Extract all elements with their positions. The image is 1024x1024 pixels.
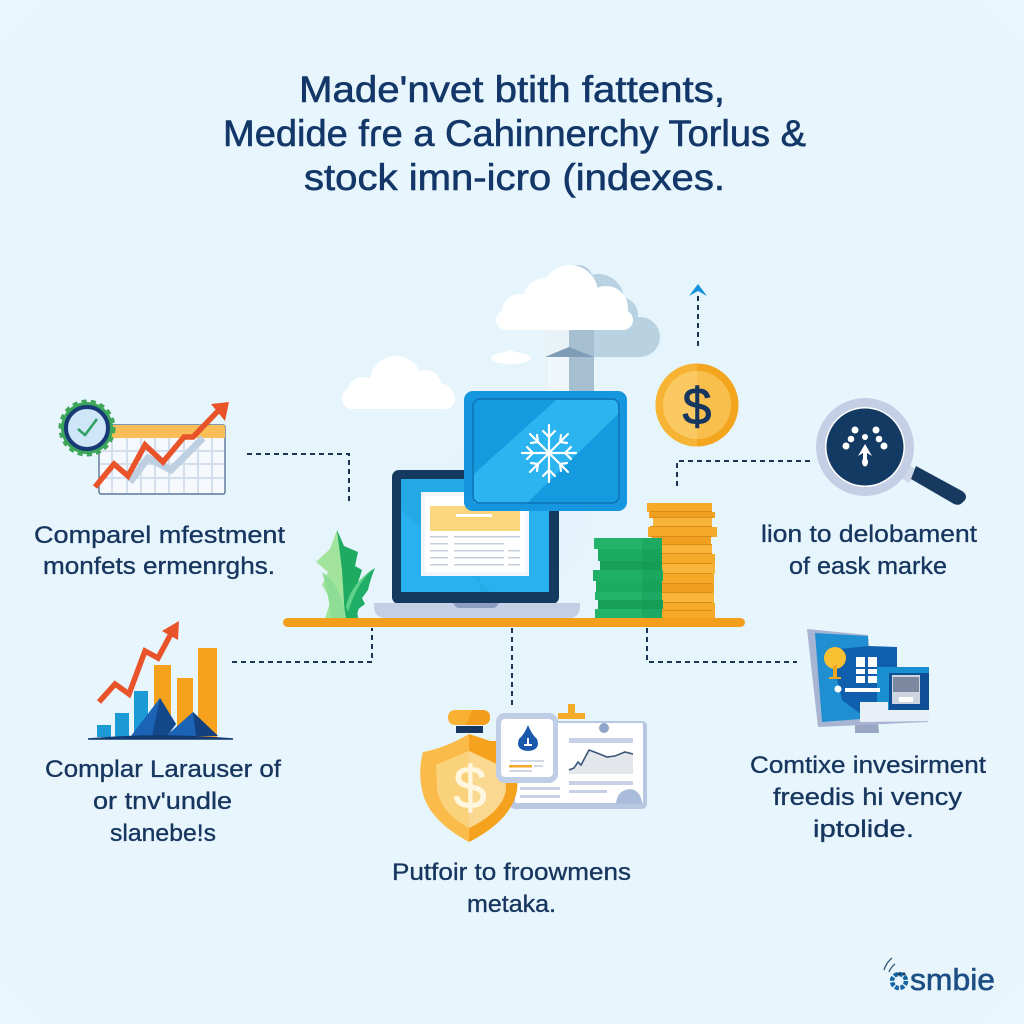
- text: bottom centre: metaka.: [467, 891, 556, 918]
- icon: bar chart with mountains: [88, 621, 233, 739]
- icon: gold coin stack: [647, 503, 717, 618]
- text: bottom right: Comtixe invesirment: [750, 752, 986, 779]
- text: compare investment: [34, 522, 285, 580]
- dashed connectors: [232, 454, 810, 706]
- icon: dollar coin: [655, 364, 738, 446]
- text: top right: [761, 521, 977, 580]
- icon: calendar chart with gear: [61, 402, 229, 494]
- icon: dollar coin: $: [683, 378, 712, 436]
- logo: [884, 958, 995, 997]
- title: [223, 69, 806, 198]
- text: bottom right: freedis hi vency: [773, 784, 963, 811]
- icon: green cash stack: [593, 538, 663, 618]
- text: top right: of eask marke: [789, 553, 947, 580]
- title: stock imn-icro (indexes.: [304, 157, 725, 198]
- icon: report document: [510, 704, 647, 809]
- icon: main cloud: [496, 265, 633, 330]
- title: Medide fɾe a Cahinnerchy Torlus &: [223, 113, 806, 154]
- title: Made'nvet btith fattents,: [299, 69, 725, 110]
- text: complex language: [45, 756, 281, 847]
- logo: smbie: [910, 962, 995, 997]
- icon: small cloud: [491, 350, 531, 364]
- shelf: [283, 618, 745, 627]
- icon: shield money bag: [420, 710, 517, 842]
- text: bottom centre: [392, 859, 631, 918]
- text: compare investment: monfets ermenrghs.: [43, 553, 275, 580]
- icon: left cloud: [342, 356, 455, 409]
- icon: laptop: [374, 470, 580, 618]
- text: complex language: slanebe!s: [110, 820, 216, 847]
- icon: back cloud: [560, 265, 660, 357]
- icon: monitor dashboard: [807, 629, 929, 733]
- text: bottom right: [750, 752, 986, 843]
- text: compare investment: Comparel mfestment: [34, 522, 285, 549]
- icon: snowflake tablet: [464, 391, 627, 511]
- icon: shield money bag: $: [453, 754, 487, 821]
- text: complex language: or tnv'undle: [93, 788, 232, 815]
- icon: up arrow: [689, 284, 707, 350]
- text: top right: lion to delobament: [761, 521, 977, 548]
- icon: magnifying glass: [816, 398, 966, 505]
- icon: plant: [316, 530, 375, 618]
- icon: droplet card: [496, 713, 558, 783]
- text: complex language: Complar Larauser of: [45, 756, 281, 783]
- text: bottom centre: Putfoir to froowmens: [392, 859, 631, 886]
- text: bottom right: iptolide.: [813, 816, 914, 843]
- icon: upload arrow column: [545, 330, 594, 392]
